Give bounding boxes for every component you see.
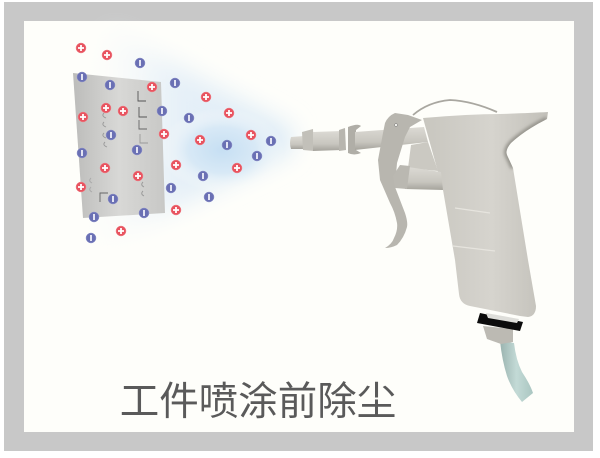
workpiece slots xyxy=(90,91,148,202)
nozzle barrel xyxy=(290,125,428,154)
trigger pivot xyxy=(394,124,398,126)
trigger web xyxy=(408,142,438,171)
black collar xyxy=(477,313,523,331)
title: 工件喷涂前除尘 xyxy=(120,380,396,424)
negative charges xyxy=(77,58,276,243)
air cable xyxy=(413,100,497,115)
air hose xyxy=(500,341,533,402)
handle shading xyxy=(506,119,547,168)
spray cloud xyxy=(70,28,292,250)
hose nut xyxy=(483,326,513,344)
white ring xyxy=(486,313,519,323)
workpiece panel xyxy=(73,73,165,218)
trigger lever xyxy=(378,113,422,248)
handle grip lines xyxy=(453,208,495,251)
air gun xyxy=(290,100,548,402)
positive charges xyxy=(76,43,256,236)
gun handle body xyxy=(423,112,548,317)
lower tube xyxy=(393,165,443,190)
